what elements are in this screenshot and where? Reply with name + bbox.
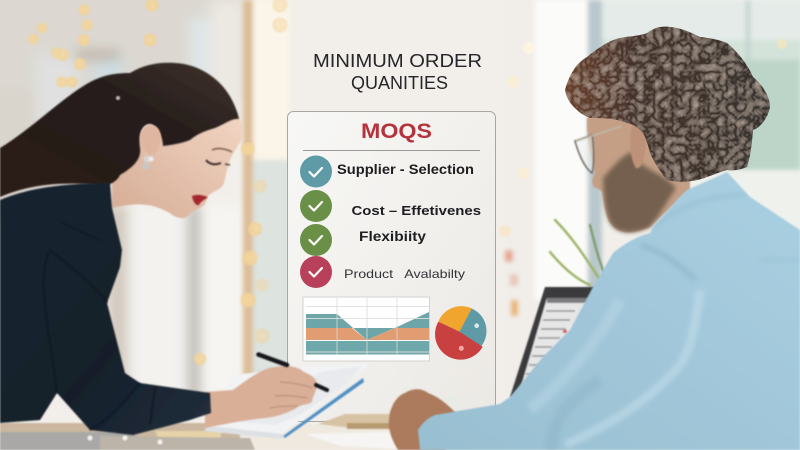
item: product availability [300, 256, 465, 288]
man: ear [630, 123, 646, 168]
checklist [300, 150, 481, 288]
title [313, 50, 482, 93]
man: face and neck [587, 110, 690, 232]
pie chart [435, 306, 486, 360]
bokeh lights [28, 0, 787, 366]
item: supplier selection [300, 156, 474, 188]
woman: hand and wrist [205, 366, 317, 428]
man: hand [389, 389, 462, 450]
woman: notepad [204, 363, 370, 439]
woman: blazer [0, 183, 211, 435]
item: flexibility: Flexibiity [359, 229, 427, 244]
title: MINIMUM ORDER [313, 50, 482, 71]
title: QUANITIES [351, 72, 448, 93]
man: beard [603, 152, 676, 232]
panel heading: MOQS: MOQS [361, 120, 432, 143]
table and desk items [0, 395, 496, 450]
woman: eye, brow, lips [192, 149, 232, 205]
woman: ear and earring [116, 96, 161, 170]
man: curly hair [565, 27, 770, 182]
item: cost effectiveness: Cost – Effetivenes [352, 203, 481, 218]
item: supplier selection: Supplier - Selection [337, 162, 474, 177]
man: shirt [418, 172, 800, 450]
woman: pen [258, 354, 327, 408]
translucent board panel [288, 112, 496, 422]
man: glasses [575, 126, 622, 173]
item: product availability: Product Avalabilty [344, 267, 465, 281]
item: flexibility [300, 224, 427, 256]
man [389, 27, 800, 450]
area chart [303, 297, 430, 361]
item: cost effectiveness [300, 190, 481, 222]
plant [550, 220, 607, 285]
woman: neck and face [112, 108, 243, 218]
woman: ponytail and hair [0, 63, 239, 197]
woman [0, 63, 370, 439]
man: shirt folds [530, 195, 800, 450]
laptop [510, 287, 600, 400]
